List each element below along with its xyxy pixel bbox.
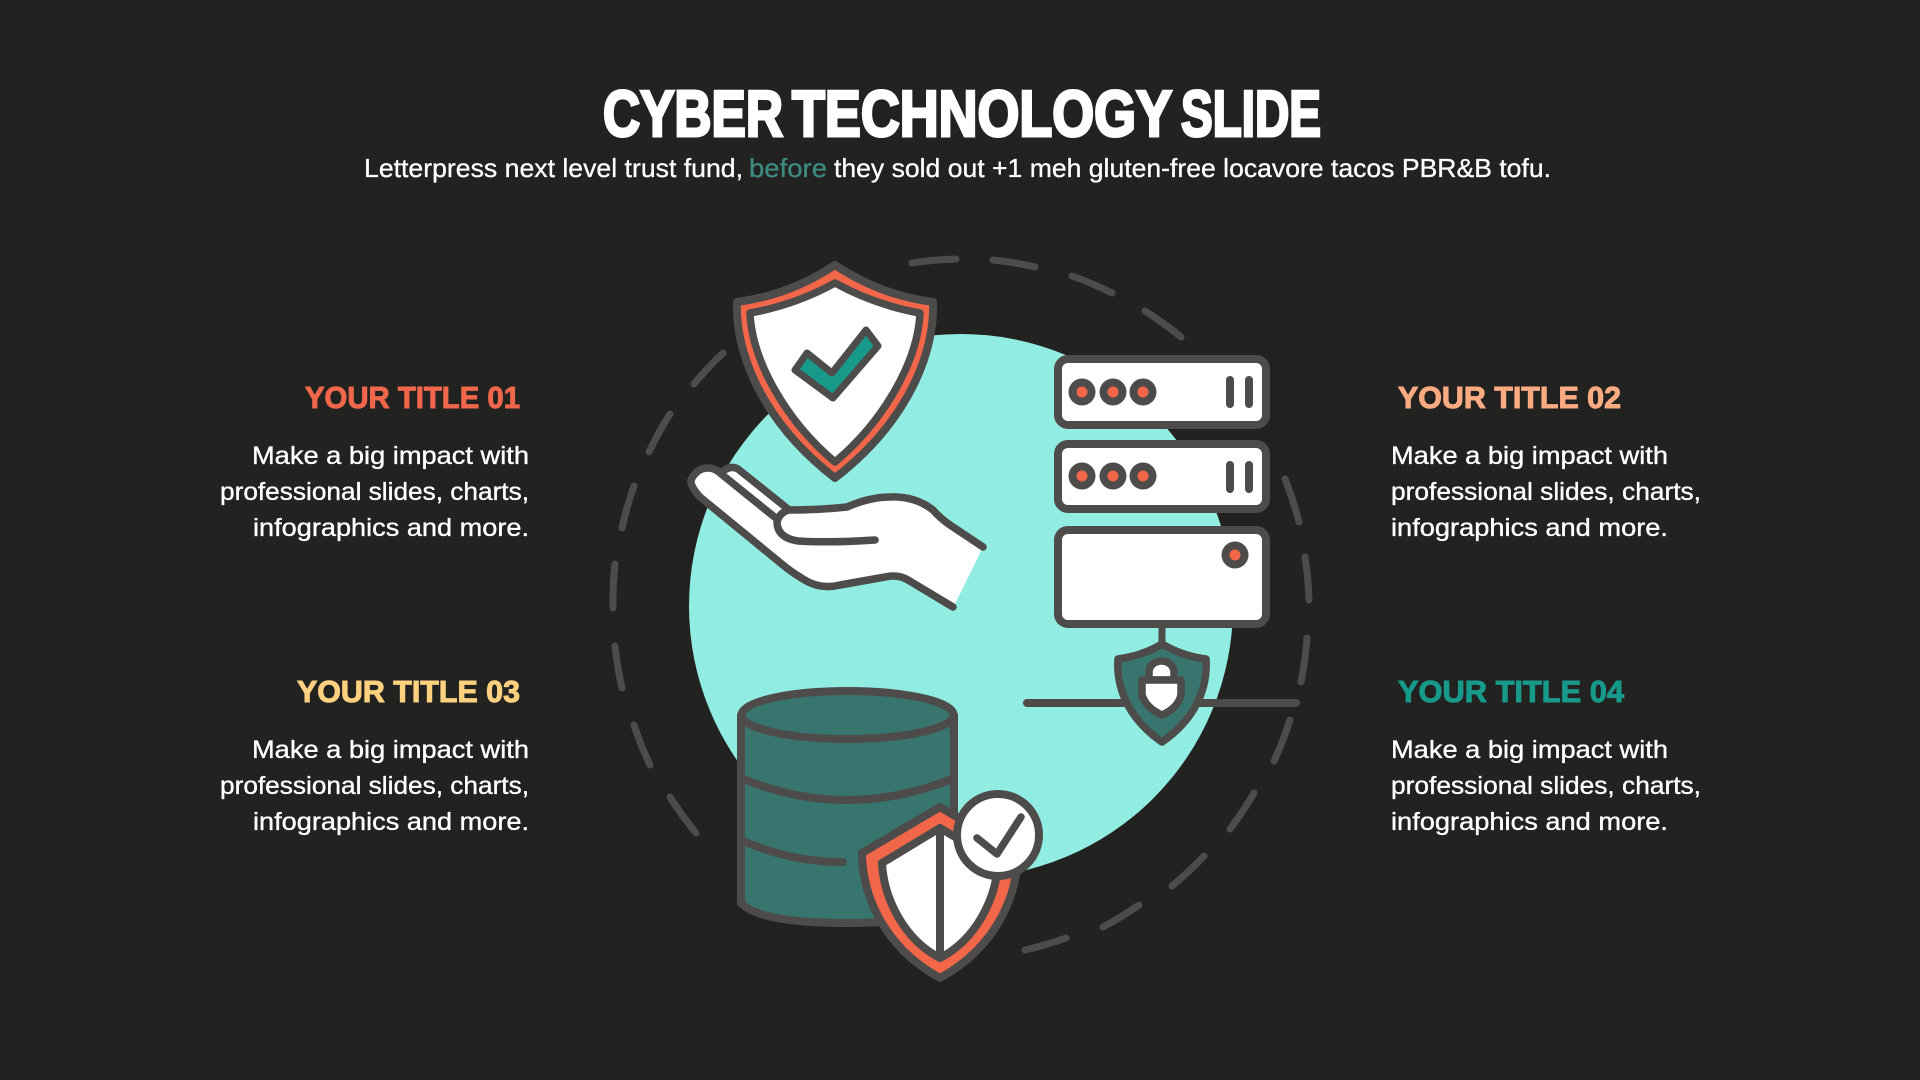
icon: hand (691, 467, 983, 607)
block 04: Make a big impact with (1391, 736, 1668, 764)
block 02: YOUR TITLE 02 (1398, 380, 1621, 415)
server 2 (1058, 444, 1266, 509)
icon: database (741, 691, 954, 923)
block 01: YOUR TITLE 01 (305, 380, 520, 415)
title: SLIDE (1181, 77, 1321, 150)
block 01 (220, 380, 529, 542)
server 3 (1058, 530, 1266, 624)
block 03: infographics and more. (253, 808, 529, 836)
icon: server stack (1058, 359, 1266, 624)
icon: shield with badge (862, 794, 1039, 978)
title: TECHNOLOGY (792, 77, 1172, 150)
icon: teal checkmark (795, 330, 878, 398)
block 02: professional slides, charts, (1391, 478, 1701, 506)
block 04 (1391, 674, 1701, 836)
block 03 (220, 674, 529, 836)
subtitle (364, 153, 1551, 183)
block 02: infographics and more. (1391, 514, 1668, 542)
subtitle: Letterpress next level trust fund, (364, 153, 743, 183)
icon: shield with check (737, 265, 933, 478)
block 04: YOUR TITLE 04 (1398, 674, 1625, 709)
icon: check badge (957, 794, 1039, 876)
block 03: professional slides, charts, (220, 772, 529, 800)
block 01: professional slides, charts, (220, 478, 529, 506)
block 02 (1391, 380, 1701, 542)
block 04: professional slides, charts, (1391, 772, 1701, 800)
dashed ring (613, 259, 1309, 950)
block 01: Make a big impact with (252, 442, 529, 470)
teal circle (689, 334, 1233, 878)
server 1 (1058, 359, 1266, 425)
block 03: YOUR TITLE 03 (297, 674, 520, 709)
title: CYBER (603, 77, 783, 150)
block 01: infographics and more. (253, 514, 529, 542)
subtitle: before (749, 153, 827, 183)
block 03: Make a big impact with (252, 736, 529, 764)
block 02: Make a big impact with (1391, 442, 1668, 470)
title (603, 77, 1321, 150)
subtitle: they sold out +1 meh gluten-free locavore tacos PBR&B tofu. (834, 153, 1551, 183)
block 04: infographics and more. (1391, 808, 1668, 836)
icon: network lock shield (1027, 626, 1296, 742)
